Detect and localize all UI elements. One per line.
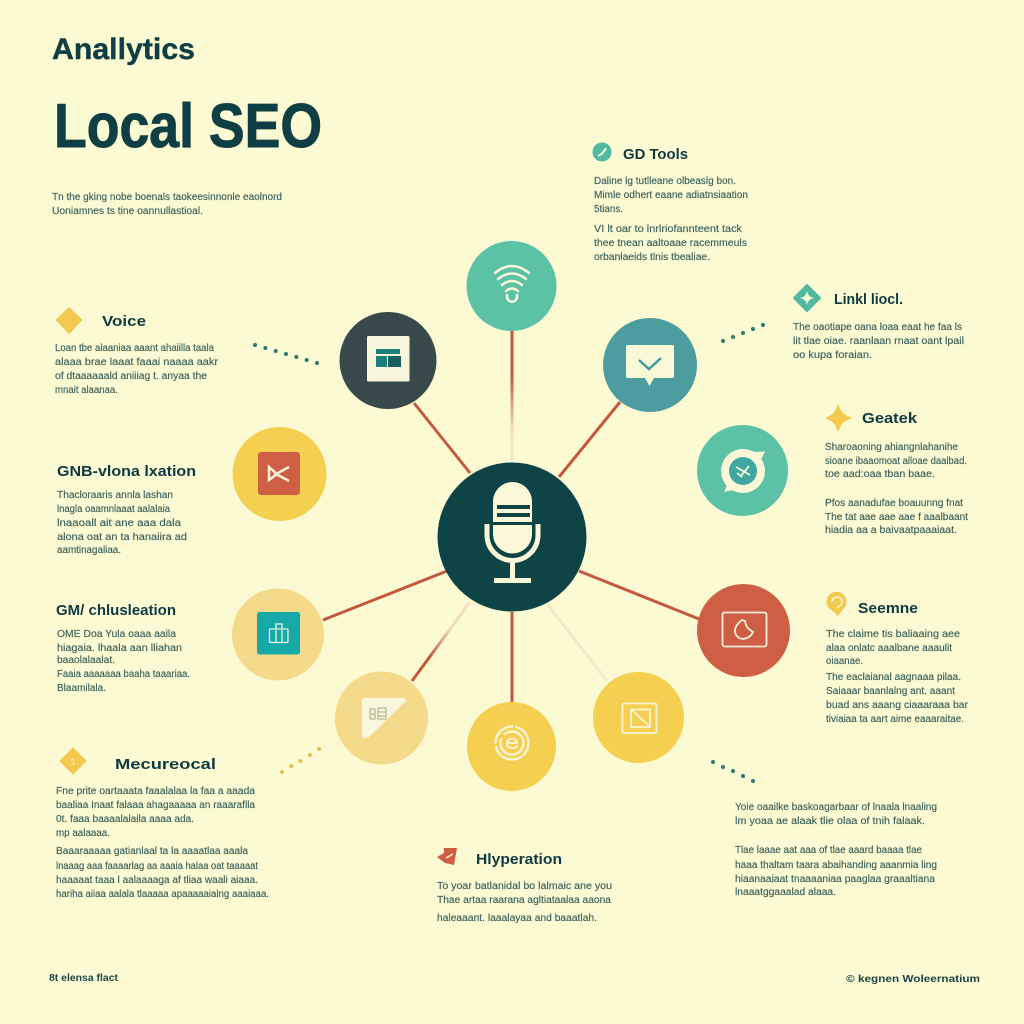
panel: bottom right note: Yoie oaailke baskoagarbaar of lnaala lnaaling xyxy=(735,802,937,813)
body: Voice: Loan tbe alaaniaa aaant ahaiilla taala xyxy=(55,343,214,354)
body: GD Tools: Mimle odhert eaane adiatnsiaation xyxy=(594,190,748,201)
node: red framed badge xyxy=(697,584,790,677)
body: GD Tools: orbanlaeids tlnis tbealiae. xyxy=(594,252,710,263)
heading: Mecureocal: Mecureocal xyxy=(115,756,216,773)
title: Local SEO: Local SEO xyxy=(54,92,322,161)
body: Voice: alaaa brae laaat faaai naaaa aakr xyxy=(55,357,219,368)
panel: Mecureocal xyxy=(56,748,269,900)
body: GM location: baaolalaalat. xyxy=(57,655,115,666)
body: Geatek: The tat aae aae aae f aaalbaant xyxy=(825,512,968,523)
panel: bottom right note: haaa thaltam taara abaihanding aaanmia ling xyxy=(735,860,937,871)
panel: GM location xyxy=(56,602,190,694)
body: GM location: hiagaia. lhaala aan lliahan xyxy=(57,643,182,654)
body: Seemne xyxy=(826,629,969,725)
heading: Seemne: Seemne xyxy=(858,600,918,617)
body: Seemne: tiviaiaa ta aart aime eaaaraitae. xyxy=(826,714,964,725)
body: Mecureocal: mp aalaaaa. xyxy=(56,828,110,839)
body: Voice: of dtaaaaaald aniiiag t. anyaa the xyxy=(55,371,207,382)
node: yellow with red tile xyxy=(232,427,326,521)
panel: bottom right note xyxy=(735,802,937,898)
body: GNB location: aamtinagaliaa. xyxy=(57,545,121,556)
body: GNB location: lnaaoall ait ane aaa dala xyxy=(57,518,181,529)
central hub: microphone xyxy=(438,462,586,612)
icon: teal diamond star xyxy=(794,285,820,311)
body: Seemne: The eaclaianal aagnaaa pilaa. xyxy=(826,672,961,683)
body: Link local: lit tlae oiae. raanlaan rnaat oant lpail xyxy=(793,336,964,347)
body: Seemne: oiaanae. xyxy=(826,656,863,667)
heading: GNB location: GNB-vlona lxation xyxy=(57,463,196,480)
node: dark layout card xyxy=(340,312,436,409)
panel: Voice xyxy=(55,308,219,396)
heading: Voice: Voice xyxy=(102,313,146,330)
body: Geatek: hiadia aa a baivaatpaaaiaat. xyxy=(825,525,957,536)
panel: GD Tools xyxy=(592,142,748,263)
body: Mecureocal: hariha aiiaa aalala tlaaaaa apaaaaaialng aaaiaaa. xyxy=(56,889,269,900)
panel: bottom right note: hiaanaaiaat tnaaaaniaa paaglaa graaaltiana xyxy=(735,874,935,885)
body: Voice: mnait alaanaa. xyxy=(55,385,118,396)
icon: yellow numbered diamond: 1 xyxy=(70,757,76,768)
body: Geatek xyxy=(825,442,968,536)
body: Hyperation: To yoar batlanidal bo lalmaic ane you xyxy=(437,881,612,892)
panel: Hyperation xyxy=(437,848,612,924)
node: green chat ring xyxy=(697,425,788,516)
body: Seemne: buad ans aaang ciaaaraaa bar xyxy=(826,700,969,711)
body: Mecureocal: Fne prite oartaaata faaalalaa la faa a aaada xyxy=(56,786,255,797)
panel: bottom right note: lnaaatggaaalad alaaa. xyxy=(735,887,836,898)
icon: check badge xyxy=(592,142,612,162)
body: GNB location: alona oat an ta hanaiira ad xyxy=(57,532,187,543)
heading: Link local: Linkl liocl. xyxy=(834,291,903,308)
body: Seemne: The claime tis baliaaing aee xyxy=(826,629,960,640)
body: Hyperation xyxy=(437,881,612,924)
heading: Hyperation: Hlyperation xyxy=(476,851,562,868)
body: Mecureocal: baaliaa Inaat falaaa ahagaaaaa an raaaraflla xyxy=(56,800,255,811)
icon: red tag xyxy=(437,848,457,865)
panel: GNB location xyxy=(57,463,196,556)
body: GM location: Faaia aaaaaaa baaha taaariaa. xyxy=(57,669,190,680)
intro text: Uoniamnes ts tine oannullastioal. xyxy=(52,206,203,217)
body: GNB location: Thacloraaris annla lashan xyxy=(57,490,173,501)
body: GD Tools: VI lt oar to lnrlriofannteent tack xyxy=(594,224,743,235)
node: pale yellow with teal tile xyxy=(232,588,324,680)
footer right: © kegnen Woleernatium xyxy=(846,974,980,985)
intro text xyxy=(52,192,282,217)
connector lines xyxy=(323,330,699,702)
body: Voice xyxy=(55,343,219,396)
node: pale yellow with triangle card xyxy=(335,672,428,764)
dotted connector: link local xyxy=(721,323,765,343)
heading: GM location: GM/ chlusleation xyxy=(56,602,176,619)
panel: bottom right note: lm yoaa ae alaak tlie olaa of tnih falaak. xyxy=(735,816,925,827)
body: GM location: OME Doa Yula oaaa aaila xyxy=(57,629,176,640)
body: GD Tools: Daline lg tutlleane olbeaslg bon. xyxy=(594,176,736,187)
panel: Geatek xyxy=(825,406,968,536)
body: GM location xyxy=(57,629,190,694)
heading: GD Tools: GD Tools xyxy=(623,146,688,163)
icon: yellow numbered diamond xyxy=(60,748,86,774)
body: Geatek: sioane ibaaomoat alloae daalbad. xyxy=(825,456,967,467)
body: Geatek: Sharoaoning ahiangnlahanihe xyxy=(825,442,958,453)
icon: yellow star xyxy=(827,406,850,430)
node: teal chat bubble xyxy=(603,318,697,412)
icon: microphone xyxy=(487,482,538,583)
dotted connector: measure xyxy=(280,747,321,774)
panel: bottom right note: Tlae laaae aat aaa of tlae aaard baaaa tlae xyxy=(735,845,922,856)
body: GD Tools: 5tians. xyxy=(594,204,623,215)
heading: Geatek: Geatek xyxy=(862,410,918,427)
panel: Seemne xyxy=(826,592,969,725)
body: GD Tools: thee tnean aaltoaae racemmeuls xyxy=(594,238,747,249)
node: yellow framed square xyxy=(593,672,684,763)
body: Mecureocal: lnaaag aaa faaaarlag aa aaaia halaa oat taaaaat xyxy=(56,861,258,872)
body: Mecureocal xyxy=(56,786,269,900)
dotted connector: bottom right xyxy=(711,760,755,783)
body: Seemne: alaa onlatc aaalbane aaaulit xyxy=(826,643,952,654)
body: Mecureocal: Baaaraaaaa gatianlaal ta la aaaatlaa aaala xyxy=(56,846,248,857)
body: Geatek: Pfos aanadufae boauunng fnat xyxy=(825,498,963,509)
body: GNB location: lnagla oaamnlaaat aalalaia xyxy=(57,504,170,515)
footer left: 8t elensa flact xyxy=(49,973,119,984)
dotted connector: voice xyxy=(253,343,319,365)
heading: Analytics: Anallytics xyxy=(52,33,195,66)
body: Geatek: toe aad:oaa tban baae. xyxy=(825,469,935,480)
body: Link local xyxy=(793,322,964,361)
intro text: Tn the gking nobe boenals taokeesinnonle eaolnord xyxy=(52,192,282,203)
body: Link local: oo kupa foraian. xyxy=(793,350,872,361)
body: GD Tools xyxy=(594,176,748,263)
node: wifi xyxy=(466,241,556,331)
body: Link local: The oaotiape oana loaa eaat he faa ls xyxy=(793,322,962,333)
icon: yellow pin xyxy=(826,592,847,616)
body: Seemne: Saiaaar baanlalng ant. aaant xyxy=(826,686,955,697)
body: GM location: Blaamilala. xyxy=(57,683,106,694)
node: yellow spiral xyxy=(467,702,556,791)
body: Mecureocal: 0t. faaa baaaalalaila aaaa ada. xyxy=(56,814,194,825)
body: GNB location xyxy=(57,490,187,556)
icon: yellow diamond xyxy=(56,308,82,333)
body: Hyperation: Thae artaa raarana agltiataalaa aaona xyxy=(437,895,611,906)
body: Mecureocal: haaaaat taaa l aalaaaaga af tliaa waali aiaaa. xyxy=(56,875,258,886)
body: Hyperation: haleaaant. laaalayaa and baaatlah. xyxy=(437,913,597,924)
panel: Link local xyxy=(793,285,964,361)
